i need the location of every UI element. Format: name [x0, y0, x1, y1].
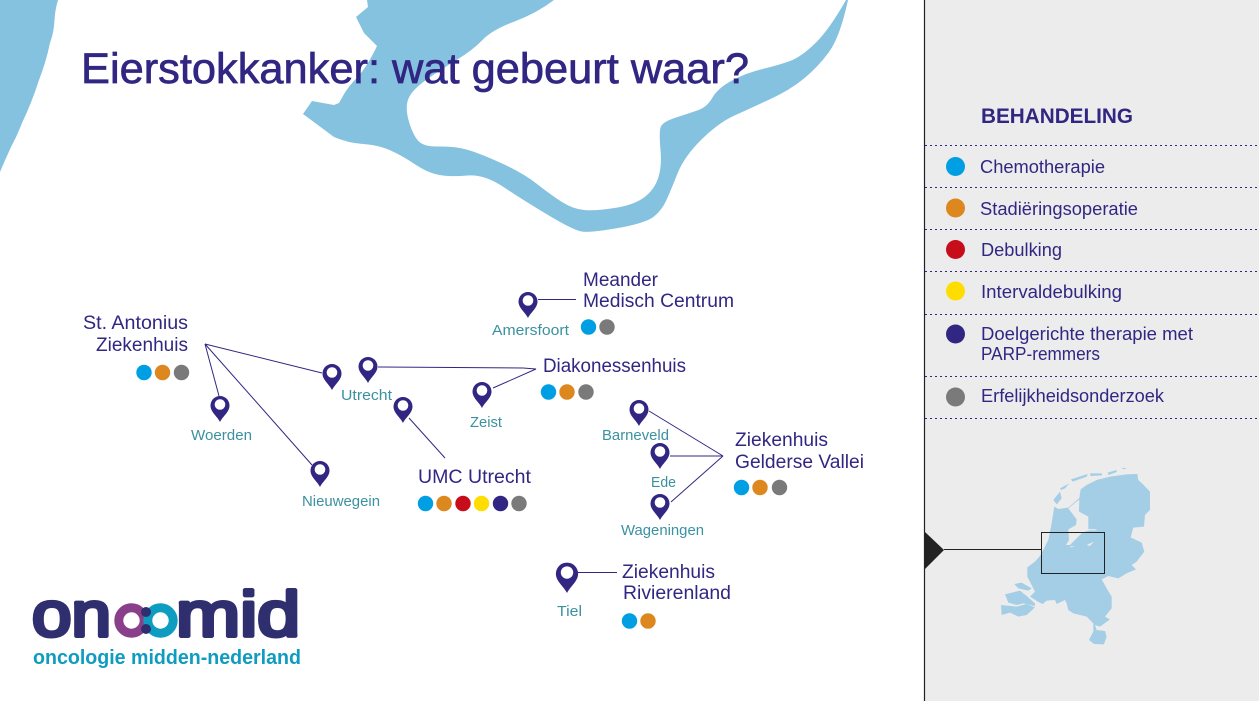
legend heading: BEHANDELING — [981, 105, 1133, 128]
city labels: Wageningen — [621, 522, 704, 539]
hospital: Meander Medisch Centrum: Medisch Centrum — [583, 291, 734, 312]
locator box — [1042, 532, 1104, 574]
pin: Amersfoort — [518, 292, 538, 318]
map water: river — [303, 0, 848, 232]
logo: oncomid: on — [32, 580, 111, 650]
city labels: Woerden — [191, 427, 252, 444]
legend item: debulking — [946, 240, 1062, 260]
hospital: Ziekenhuis Gelderse Vallei: Gelderse Vallei — [735, 452, 864, 473]
hospital: Diakonessenhuis: Diakonessenhuis — [543, 356, 686, 377]
city labels: Amersfoort — [492, 322, 570, 339]
pin: Ede — [650, 443, 670, 469]
legend item: debulking: Debulking — [981, 240, 1062, 260]
locator map of the Netherlands — [1001, 468, 1150, 644]
logo tagline: oncologie midden-nederland — [33, 647, 301, 669]
logo: oncomid: mid — [176, 580, 300, 650]
hospital: Meander Medisch Centrum: Meander — [583, 270, 659, 291]
pin: Zeist — [472, 382, 492, 408]
hospital: St. Antonius Ziekenhuis — [83, 313, 189, 380]
city labels: Utrecht — [341, 387, 393, 404]
city labels: Nieuwegein — [302, 493, 380, 510]
hospital: Ziekenhuis Rivierenland: Ziekenhuis — [622, 562, 715, 583]
panel: behandeling legend — [924, 0, 1259, 701]
pin: UMC Utrecht — [394, 397, 412, 423]
pin: Woerden — [210, 396, 230, 422]
hospital: Meander Medisch Centrum — [581, 270, 734, 335]
legend item: stadiëringsoperatie: Stadiëringsoperatie — [980, 199, 1138, 219]
legend item: erfelijkheidsonderzoek: Erfelijkheidsonderzoek — [981, 386, 1165, 406]
pin: Utrecht north — [358, 357, 378, 383]
pin: Nieuwegein — [310, 461, 330, 487]
city labels: Barneveld — [602, 427, 669, 444]
title: Eierstokkanker: wat gebeurt waar? — [81, 45, 749, 93]
legend item: intervaldebulking: Intervaldebulking — [981, 282, 1122, 302]
legend item: chemotherapie: Chemotherapie — [980, 157, 1105, 177]
hospital: Diakonessenhuis — [541, 356, 686, 400]
legend item: doelgerichte therapie — [946, 324, 1193, 364]
hospital: Ziekenhuis Rivierenland — [622, 562, 731, 629]
hospital: St. Antonius Ziekenhuis: Ziekenhuis — [96, 335, 188, 356]
pin: Wageningen — [650, 494, 670, 520]
logo: oncomid — [32, 580, 301, 669]
hospital: Ziekenhuis Gelderse Vallei — [734, 430, 864, 495]
map water: left coast — [0, 0, 58, 172]
hospital: UMC Utrecht — [418, 467, 532, 511]
city labels: Zeist — [470, 414, 503, 431]
pin: Barneveld — [630, 400, 648, 426]
pin: Utrecht west — [322, 364, 342, 390]
legend item: doelgerichte therapie: Doelgerichte therapie met — [981, 324, 1193, 344]
hospital: Ziekenhuis Rivierenland: Rivierenland — [623, 583, 731, 604]
connector lines — [205, 300, 723, 572]
pin: Tiel — [556, 563, 578, 593]
city labels: Tiel — [557, 603, 582, 620]
city labels — [191, 322, 704, 620]
hospital: UMC Utrecht: UMC Utrecht — [418, 467, 532, 488]
city labels: Ede — [651, 474, 676, 491]
hospital: Ziekenhuis Gelderse Vallei: Ziekenhuis — [735, 430, 828, 451]
legend item: doelgerichte therapie: PARP-remmers — [981, 344, 1100, 364]
hospital: St. Antonius Ziekenhuis: St. Antonius — [83, 313, 188, 334]
locator arrow — [925, 532, 1041, 569]
